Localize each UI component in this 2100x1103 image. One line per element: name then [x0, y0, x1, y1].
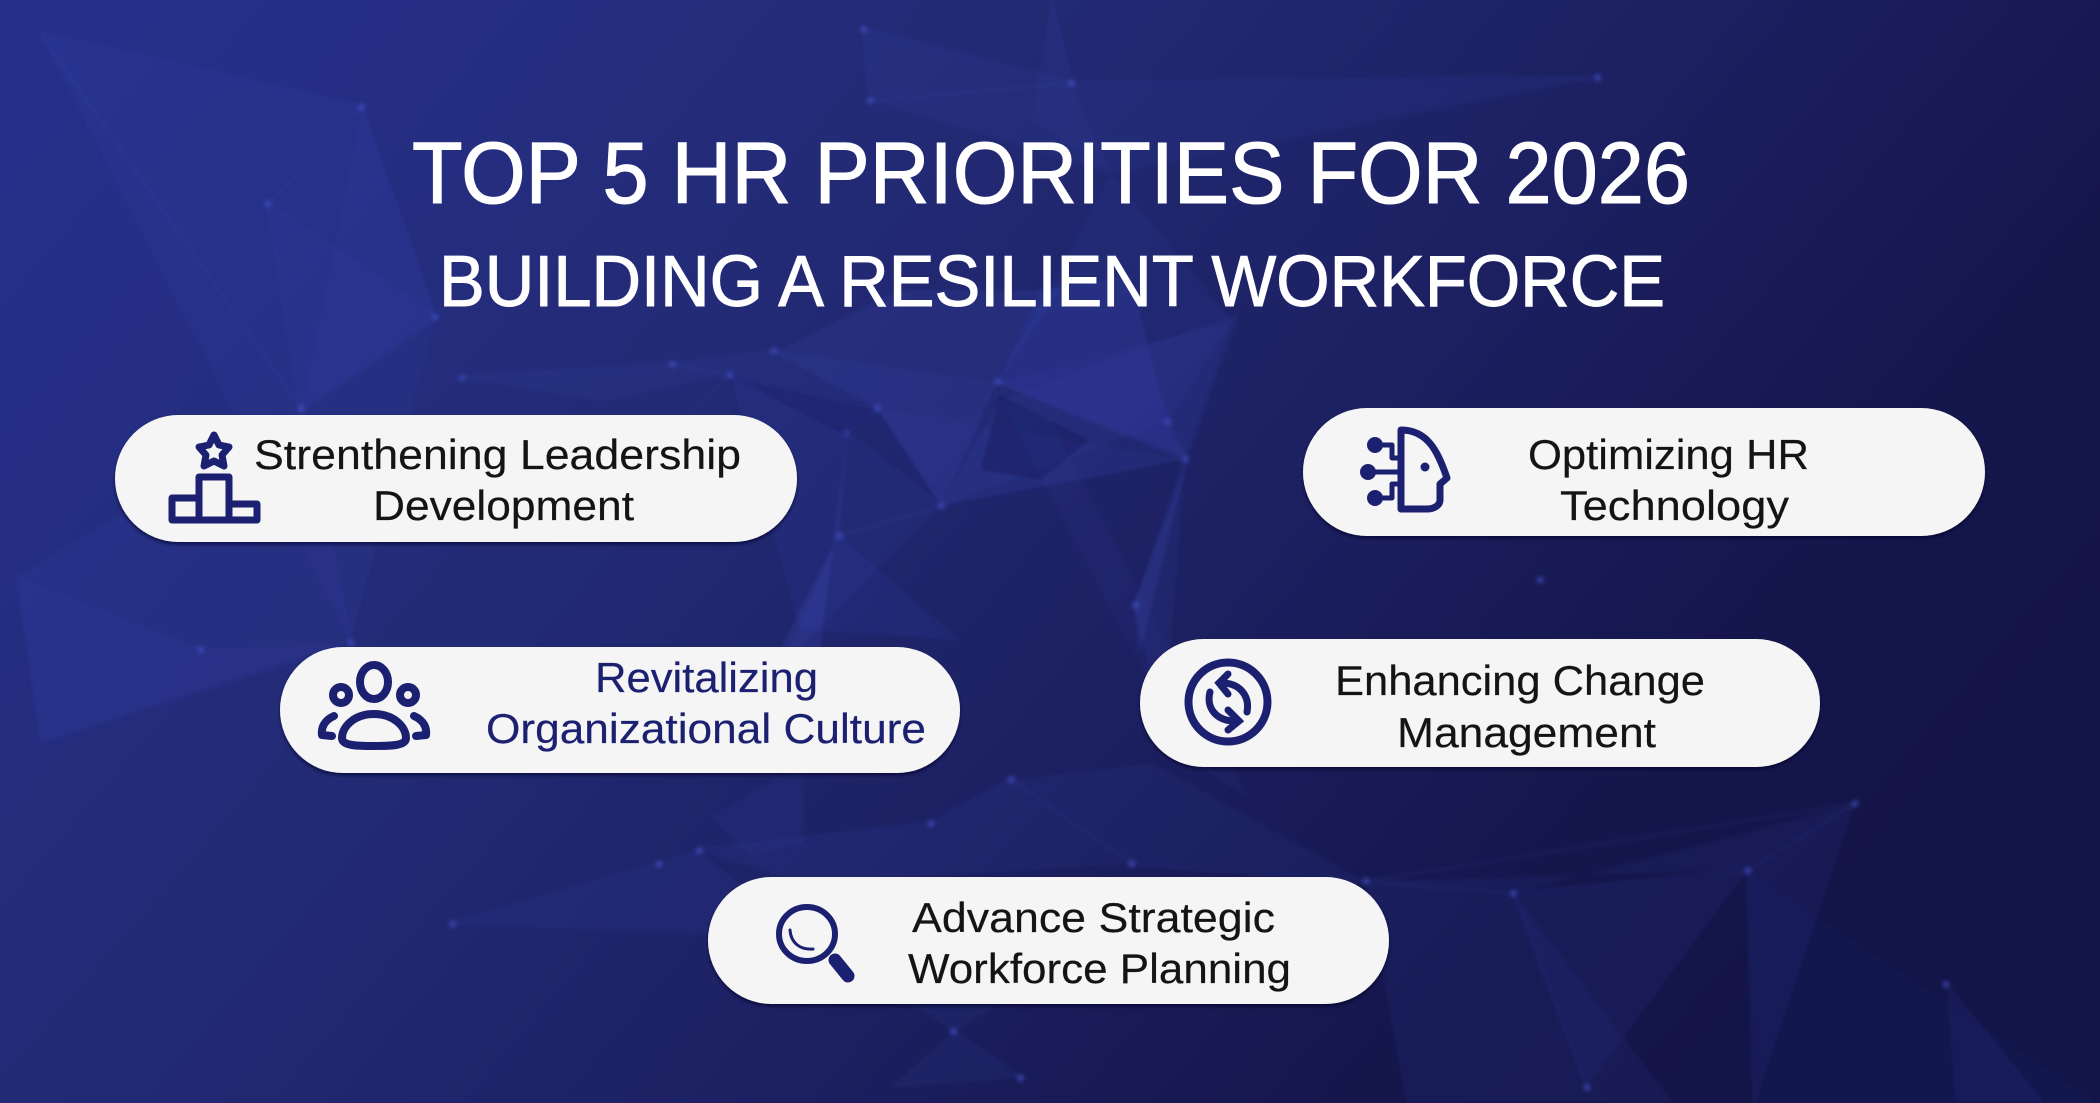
title: TOP 5 HR PRIORITIES FOR 2026	[412, 125, 1690, 222]
panel: enhancing change management	[1140, 639, 1820, 767]
text: Development: Development	[373, 482, 634, 529]
central polygon highlights	[731, 275, 1250, 800]
text: Revitalizing: Revitalizing	[595, 654, 818, 701]
text: Technology: Technology	[1560, 482, 1789, 529]
text: Optimizing HR: Optimizing HR	[1528, 431, 1809, 478]
panel: revitalizing organizational culture	[280, 647, 960, 773]
icon: AI head	[1360, 430, 1447, 509]
icon: change cycle	[1188, 662, 1268, 742]
text: Advance Strategic: Advance Strategic	[912, 894, 1275, 941]
panel: optimizing HR technology	[1303, 408, 1985, 536]
text: Strenthening Leadership: Strenthening Leadership	[254, 431, 741, 478]
panel: strengthening leadership development	[115, 415, 797, 542]
subtitle: BUILDING A RESILIENT WORKFORCE	[439, 242, 1665, 322]
text: Organizational Culture: Organizational Culture	[486, 705, 926, 752]
text: Enhancing Change: Enhancing Change	[1335, 657, 1705, 704]
icon: magnifying glass	[779, 907, 848, 976]
text: Workforce Planning: Workforce Planning	[908, 945, 1291, 992]
text: Management: Management	[1397, 709, 1656, 756]
icon: people group	[322, 665, 426, 746]
icon: podium with star	[172, 435, 257, 520]
panel: advance strategic workforce planning	[708, 877, 1389, 1004]
